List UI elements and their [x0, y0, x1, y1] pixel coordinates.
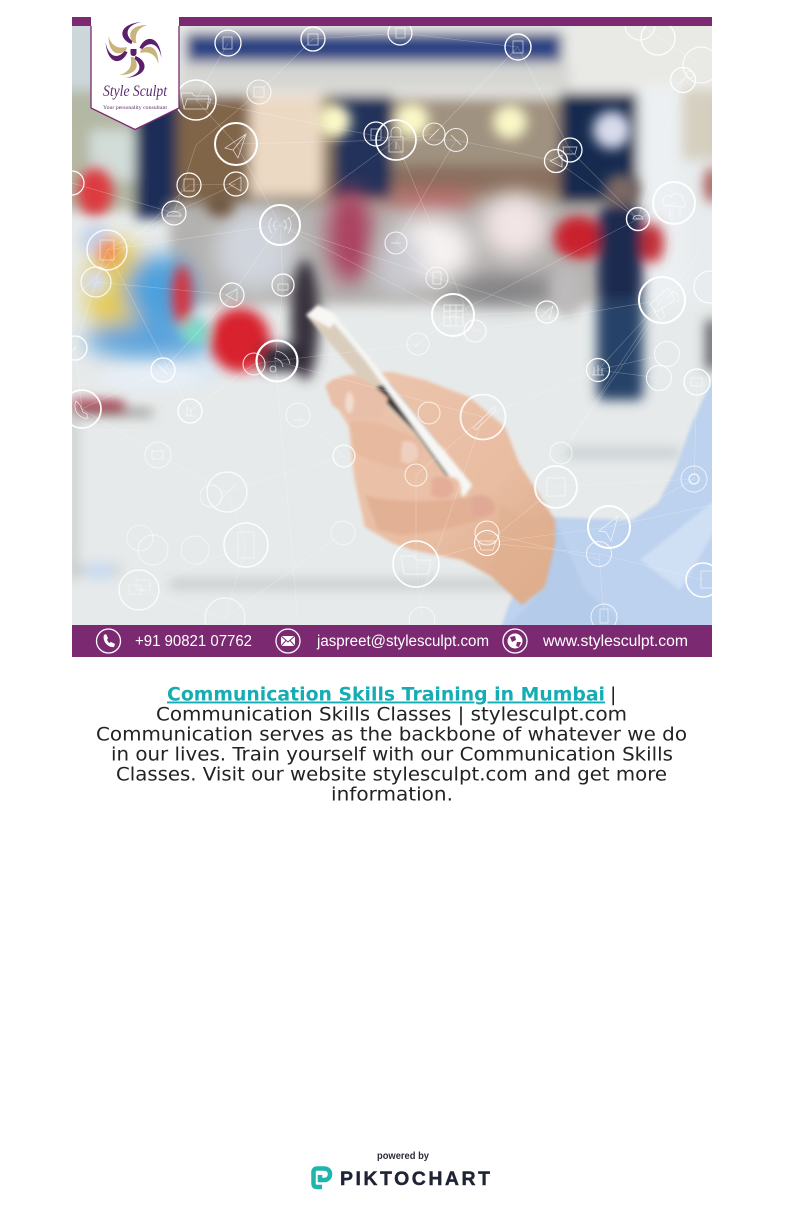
description text block: Classes. Visit our website stylesculpt.com and get more	[116, 764, 667, 786]
icon: open folder lower	[393, 541, 439, 587]
description text block: in our lives. Train yourself with our Communication Skills	[111, 744, 673, 766]
icon: paper plane	[215, 123, 257, 165]
network icons: large bright circles	[63, 80, 695, 610]
description text block: |	[610, 684, 616, 706]
icon: notebook	[224, 523, 268, 567]
icon: keypad device	[432, 294, 474, 336]
hand holding phone	[306, 305, 555, 605]
logo tagline: Your personality consultant	[103, 105, 167, 111]
network icons: small circles	[60, 10, 726, 638]
piktochart logo	[314, 1168, 490, 1190]
icon: piktochart mark	[314, 1168, 330, 1187]
logo wordmark: Style Sculpt	[103, 83, 168, 100]
headline link: Communication Skills Training in Mumbai	[167, 684, 605, 706]
powered by label: powered by	[377, 1151, 429, 1162]
icon: phone	[96, 629, 120, 653]
icon: tablet	[535, 466, 577, 508]
phone	[305, 314, 462, 497]
description text block	[96, 684, 687, 806]
icon: wifi signal	[260, 205, 300, 245]
icon: pen in circle	[207, 472, 247, 512]
network lines	[72, 25, 712, 620]
fingers	[326, 380, 390, 410]
description text block: Communication serves as the backbone of whatever we do	[96, 724, 687, 746]
icon: paper plane lower right	[588, 506, 630, 548]
shirt sleeve	[500, 373, 715, 630]
icon: telephone	[72, 389, 102, 429]
top purple bar	[72, 17, 712, 26]
icon: megaphone	[639, 277, 685, 323]
logo badge	[91, 17, 179, 130]
icon: globe	[503, 629, 527, 653]
contact bar	[72, 625, 712, 657]
email address: jaspreet@stylesculpt.com	[316, 633, 489, 650]
icon: padlock	[376, 120, 416, 160]
description text block: information.	[331, 784, 453, 806]
palm and knuckles	[325, 372, 555, 605]
icon: chat bubbles	[119, 570, 159, 610]
icon: wifi signal on dark	[256, 340, 298, 382]
photo background: blurred shopping mall	[72, 26, 712, 625]
description text block: Communication Skills Classes | stylesculpt.com	[156, 704, 627, 726]
hero photo	[72, 26, 712, 625]
icon: document	[87, 230, 127, 270]
icon: envelope	[276, 629, 300, 653]
icon: pencil	[460, 394, 506, 440]
icon: folder	[176, 80, 216, 120]
piktochart wordmark: PIKTOCHART	[340, 1168, 490, 1190]
icon: cloud transfer	[653, 182, 695, 224]
icon: pinwheel emblem	[106, 22, 162, 78]
finger nails	[345, 391, 354, 414]
website: www.stylesculpt.com	[542, 633, 688, 650]
phone number: +91 90821 07762	[135, 633, 252, 650]
